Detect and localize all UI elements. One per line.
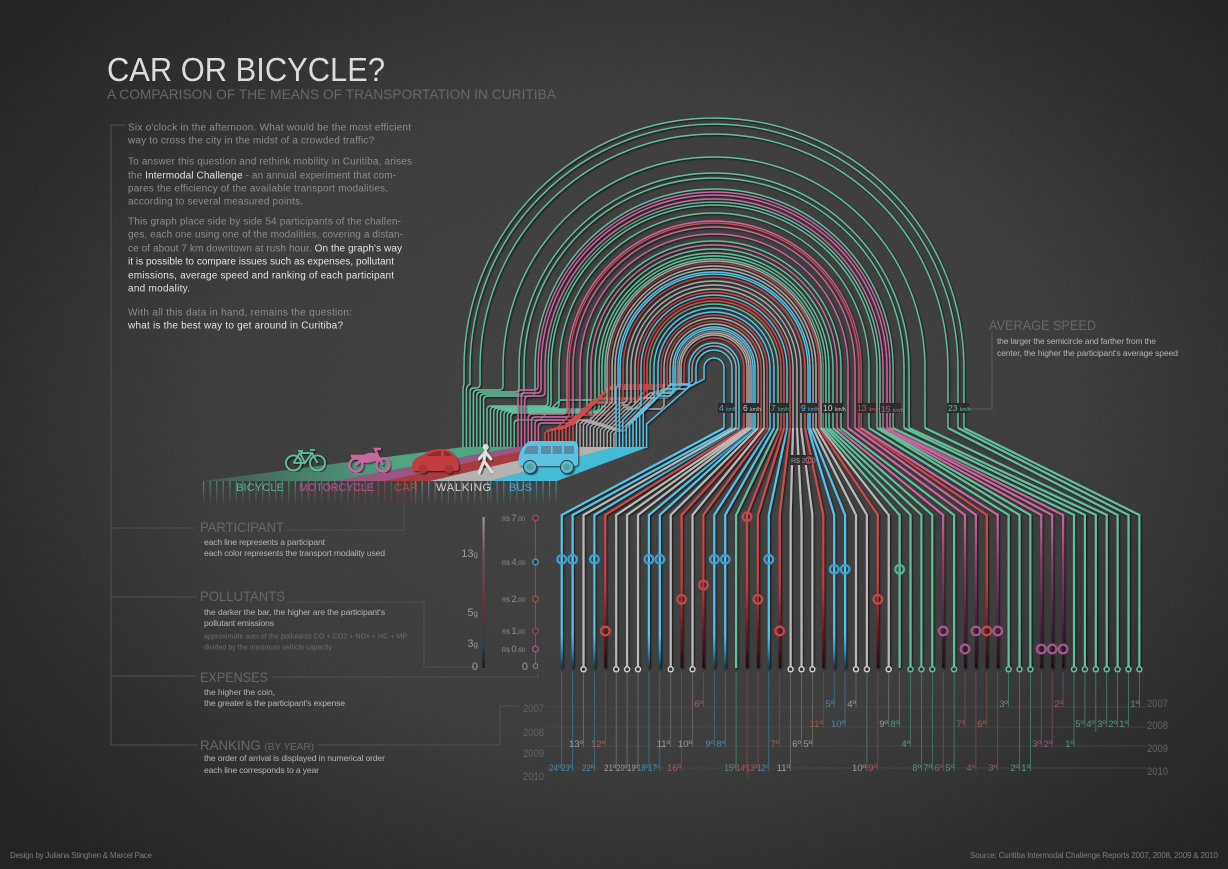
fan and vertical bars: bicycle — [736, 428, 1139, 668]
speed labels: 15 km/h — [881, 404, 904, 414]
ranking labels: bus: 17º — [648, 763, 659, 774]
ranking labels: car: 7º — [770, 739, 780, 750]
ranking labels: bicycle: 1º — [1119, 719, 1129, 730]
mode labels: WALKING — [436, 482, 491, 494]
speed labels: 9 km/h — [801, 403, 819, 413]
legend: pollutants: pollutant emissions — [204, 618, 274, 628]
speed labels — [718, 403, 971, 414]
subtitle: A COMPARISON OF THE MEANS OF TRANSPORTATION IN CURITIBA — [107, 86, 557, 102]
arches: motorcycle participants — [518, 192, 890, 448]
ranking labels: bicycle — [724, 699, 1140, 774]
arches: bus participants — [616, 272, 810, 448]
fan and vertical bars: walking — [584, 428, 889, 668]
speed labels: 6 km/h — [743, 403, 761, 413]
expense coins: motorcycle — [939, 627, 1067, 653]
intro text: according to several measured points. — [128, 196, 303, 208]
ranking labels: bus: 8º — [716, 739, 726, 750]
speed labels: 4 km/h — [719, 403, 737, 413]
ranking labels: car: 6º — [694, 699, 704, 710]
ranking labels: bicycle: 3º — [999, 699, 1009, 710]
mode labels: CAR — [394, 482, 418, 494]
ranking labels: bus: 5º — [825, 699, 835, 710]
ranking labels: car: 16º — [667, 763, 682, 774]
legend: expenses: the higher the coin, — [204, 687, 275, 697]
expense coins: bus — [557, 555, 849, 574]
intro text: emissions, average speed and ranking of each participant — [128, 270, 394, 282]
ranking labels: walking: 13º — [569, 739, 584, 750]
year labels right — [1147, 698, 1168, 778]
expense scale: R$ 7,00 — [502, 513, 526, 524]
intro text: and modality. — [128, 284, 190, 294]
legend: pollutants: divided by the maximum vehicle capacity — [204, 644, 332, 652]
expense coins: car — [601, 512, 991, 635]
intro text: it is possible to compare issues such as expenses, pollutant — [128, 256, 394, 268]
speed labels: 23 km/h — [948, 403, 971, 413]
source: Source: Curitiba Intermodal Challenge Reports 2007, 2008, 2009 & 2010 — [970, 851, 1219, 860]
ranking lines: motorcycle — [943, 672, 1063, 771]
year labels right: 2010 — [1147, 766, 1168, 778]
ranking labels: walking: 21º — [604, 763, 616, 774]
expense scale: R$ 4,00 — [502, 557, 526, 568]
ranking labels: walking: 10º — [678, 739, 693, 750]
intro text: With all this data in hand, remains the question: — [128, 308, 352, 318]
intro text: the Intermodal Challenge - an annual experiment that com- — [128, 170, 396, 182]
pollutant scale bar: 0 — [472, 661, 478, 673]
ranking labels: bus: 23º — [562, 763, 572, 774]
ranking labels: walking: 11º — [777, 763, 791, 774]
year labels left: 2010 — [523, 771, 544, 783]
ranking labels: bicycle: 5º — [1075, 719, 1085, 730]
ranking labels: bicycle: 7º — [923, 763, 933, 774]
average speed text: center, the higher the participant's average speed — [997, 348, 1178, 358]
pollutant scale bar: 13g — [461, 548, 478, 560]
expense scale: R$ 0,60 — [502, 644, 526, 655]
ranking labels: car: 13º — [746, 763, 757, 774]
speed labels: 10 km/h — [823, 403, 846, 413]
ranking labels: bicycle: 8º — [912, 763, 922, 774]
mode labels: BICYCLE — [236, 482, 284, 494]
legend: expenses: the greater is the participant's expense — [204, 698, 345, 708]
ranking labels: bus: 18º — [638, 763, 648, 774]
heading: average speed: AVERAGE SPEED — [989, 317, 1096, 333]
ranking labels: walking: 6º — [792, 739, 802, 750]
legend: ranking: the order of arrival is displayed in numerical order — [204, 753, 385, 763]
year grid lines — [545, 707, 1146, 768]
fan and vertical bars: motorcycle — [837, 428, 1063, 668]
legend: ranking: each line corresponds to a year — [204, 765, 319, 775]
zero-cost coins: bicycle — [908, 667, 1142, 672]
mode labels: MOTORCYCLE — [299, 482, 374, 494]
speed labels: 7 km/h — [771, 403, 789, 413]
centre expense tag: R$ 2,00 — [791, 458, 816, 465]
average speed text — [997, 336, 1178, 358]
connector lines between text and legend — [111, 125, 538, 745]
ranking labels: bicycle: 8º — [890, 719, 900, 730]
intro text: way to cross the city in the midst of a crowded traffic? — [127, 136, 374, 146]
centre expense tag — [790, 455, 816, 465]
ranking labels: car: 6º — [977, 719, 987, 730]
ranking labels: motorcycle: 7º — [956, 719, 966, 730]
year labels left: 2007 — [523, 703, 544, 715]
year labels left — [523, 703, 544, 783]
speed labels: 13 km/h — [857, 403, 880, 413]
zero-cost coins: walking — [581, 667, 891, 672]
year labels left: 2009 — [523, 748, 544, 760]
road with mode bands — [203, 447, 648, 481]
legend: participant: each color represents the transport modality used — [204, 548, 385, 558]
ranking labels: walking: 20º — [616, 763, 627, 774]
legend: pollutants: approximate sum of the pollutants CO + CO2 + NOx + HC + MP — [204, 634, 407, 640]
ranking labels: bus: 9º — [705, 739, 715, 750]
ranking labels: bicycle: 2º — [1010, 763, 1020, 774]
ranking labels: bicycle: 1º — [1130, 699, 1140, 710]
ranking lines: walking — [584, 672, 889, 771]
ranking labels: motorcycle: 2º — [1043, 739, 1053, 750]
arches: car participants — [545, 223, 859, 448]
ranking labels: bus: 12º — [758, 763, 768, 774]
pollutant scale bar: 5g — [467, 607, 478, 619]
legend: pollutants: POLLUTANTS — [200, 588, 285, 604]
icon: motorcycle — [350, 449, 390, 472]
ranking labels: car — [591, 699, 987, 774]
ranking labels: car: 9º — [868, 763, 878, 774]
ranking labels: car: 14º — [736, 763, 747, 774]
legend: ranking: RANKING (BY YEAR) — [200, 737, 314, 753]
ranking labels: bicycle: 1º — [1065, 739, 1075, 750]
intro text: Six o'clock in the afternoon. What would be the most efficient — [128, 122, 411, 134]
credit: Design by Juliana Stinghen & Marcel Pace — [10, 851, 153, 860]
intro text — [127, 122, 412, 332]
icon: pedestrian — [479, 444, 492, 473]
ranking lines: car — [605, 672, 987, 778]
expense scale — [502, 513, 538, 673]
intro text: ges, each one using one of the modalities, covering a distan- — [128, 230, 403, 240]
legend: pollutants: the darker the bar, the higher are the participant's — [204, 607, 385, 617]
year labels right: 2009 — [1147, 743, 1168, 755]
ranking lines: bus — [562, 672, 845, 771]
intro text: pares the efficiency of the available transport modalities, — [128, 184, 388, 194]
icon: bicycle — [286, 450, 325, 470]
ranking labels: bus: 10º — [831, 719, 846, 730]
fan and vertical bars: bus — [562, 428, 845, 668]
ranking lines: bicycle — [736, 672, 1139, 771]
intro text: This graph place side by side 54 participants of the challen- — [128, 216, 401, 228]
intro text: To answer this question and rethink mobility in Curitiba, arises — [128, 156, 412, 168]
average speed connector — [967, 332, 992, 409]
expense scale: R$ 2,00 — [502, 594, 526, 605]
ranking labels: car: 11º — [810, 719, 824, 730]
ranking labels: bicycle: 15º — [724, 763, 736, 774]
ranking labels: motorcycle: 3º — [1032, 739, 1042, 750]
ranking labels: motorcycle: 3º — [988, 763, 998, 774]
ranking labels: bicycle: 4º — [901, 739, 911, 750]
legend: expenses — [200, 669, 345, 708]
ranking labels: bicycle: 3º — [1097, 719, 1107, 730]
pollutant scale bar: 3g — [467, 638, 478, 650]
legend: expenses: EXPENSES — [200, 669, 268, 685]
ranking labels: walking: 11º — [657, 739, 671, 750]
expense scale: 0 — [522, 661, 528, 673]
intro text: what is the best way to get around in Curitiba? — [127, 320, 343, 332]
mode labels — [236, 482, 532, 494]
legend: pollutants — [200, 588, 407, 652]
fading ticks below the road — [203, 481, 557, 504]
legend: participant — [200, 519, 385, 558]
ranking labels: bicycle: 2º — [1108, 719, 1118, 730]
pollutant scale bar — [461, 517, 485, 673]
title: CAR OR BICYCLE? — [107, 51, 385, 88]
expense scale: R$ 1,00 — [502, 626, 526, 637]
ranking labels: bus: 24º — [549, 763, 561, 774]
mode labels: BUS — [509, 482, 532, 494]
legend: participant: each line represents a participant — [204, 537, 326, 547]
intro text: ce of about 7 km downtown at rush hour. On the graph's way — [128, 244, 402, 254]
arches: bicycle participants — [463, 118, 964, 448]
fan and vertical bars: car — [605, 428, 987, 668]
ranking labels: walking: 9º — [879, 719, 889, 730]
ranking labels: motorcycle — [934, 699, 1064, 774]
year labels left: 2008 — [523, 727, 544, 739]
arches: walking participants — [576, 261, 821, 448]
ranking labels: motorcycle: 2º — [1054, 699, 1064, 710]
icon: car — [412, 449, 459, 474]
legend: ranking — [200, 737, 385, 775]
ranking labels: walking: 19º — [628, 763, 638, 774]
ranking labels: motorcycle: 4º — [966, 763, 976, 774]
ranking labels: bicycle: 4º — [1086, 719, 1096, 730]
icon: bus — [518, 441, 578, 474]
ranking labels: walking: 5º — [803, 739, 813, 750]
ranking labels: bicycle: 1º — [1021, 763, 1031, 774]
ranking labels: bus: 22º — [582, 763, 594, 774]
legend: participant: PARTICIPANT — [200, 519, 284, 535]
year labels right: 2007 — [1147, 698, 1168, 710]
ranking labels: bicycle: 5º — [945, 763, 955, 774]
expense coin: bicycle — [895, 565, 904, 574]
ranking labels: motorcycle: 6º — [934, 763, 944, 774]
year labels right: 2008 — [1147, 720, 1168, 732]
average speed text: the larger the semicircle and farther from the — [997, 336, 1156, 346]
ranking labels: walking: 4º — [847, 699, 857, 710]
ranking labels: walking: 10º — [852, 763, 867, 774]
ranking labels: walking — [569, 699, 889, 774]
ranking labels: car: 12º — [591, 739, 606, 750]
ranking labels: bus — [549, 699, 846, 774]
